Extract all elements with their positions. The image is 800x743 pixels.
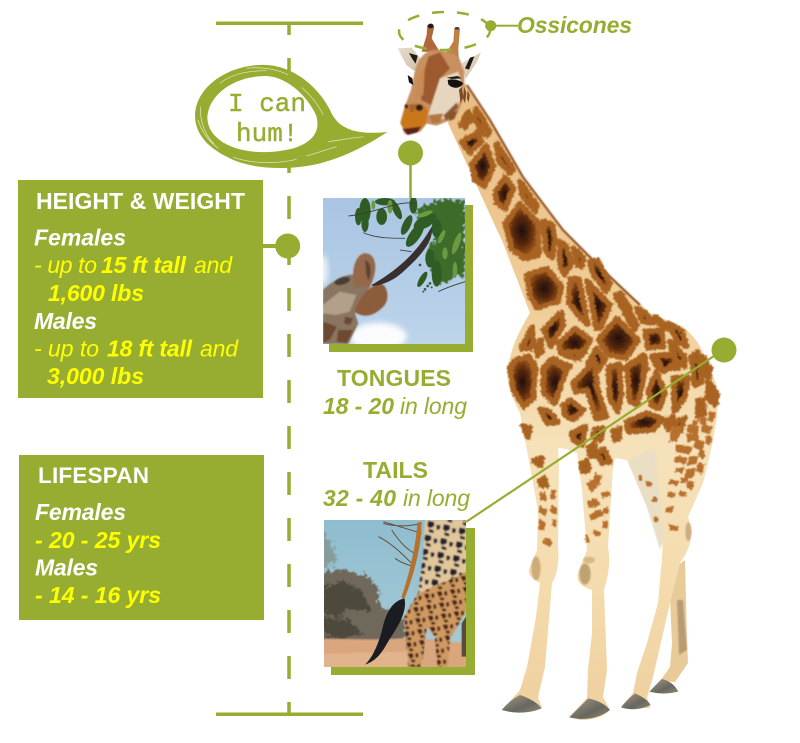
connector: tongue dot and leader [398,140,423,198]
giraffe: chest and belly spots [510,351,717,485]
giraffe: leg and thigh patches [538,412,715,546]
females lifespan [35,499,161,553]
males lifespan: Males [35,554,98,580]
giraffe: neck and shoulder spots [461,108,703,370]
females height and weight [34,252,233,306]
bubble text line 2: hum! [236,119,298,149]
females label: Females [34,224,126,250]
giraffe: far hind leg [649,560,688,693]
panel: height and weight [18,180,263,398]
males height and weight [34,336,239,389]
giraffe: eyes [448,79,463,88]
caption: tails: in long [403,485,470,511]
females height and weight: - up to [34,252,97,278]
females lifespan: Females [35,499,126,525]
caption: tails: 32 - 40 [323,485,396,511]
giraffe: face [400,50,464,135]
caption: tongues: in long [400,393,467,419]
males lifespan [35,554,161,608]
males height and weight: 3,000 lbs [47,363,144,389]
speech bubble: I can hum! [195,65,387,168]
callout: ossicones dashed ellipse and label [399,11,632,51]
males height and weight: and [200,336,239,362]
panel: lifespan [19,455,264,620]
females height and weight: 1,600 lbs [48,280,144,306]
connector: height panel to timeline [263,234,300,258]
connector: tail dot and leader [466,338,736,522]
females height and weight: 15 ft tall [101,252,187,278]
giraffe: ears [398,48,481,79]
label: ossicones: Ossicones [517,12,632,38]
giraffe: knees and hooves [502,522,691,719]
photo: tail with green offset frame [315,520,475,675]
heading: height and weight: HEIGHT & WEIGHT [36,188,245,214]
caption: tongues: TONGUES [337,365,451,391]
giraffe: ossicones [422,24,460,65]
tongue photo: foliage [355,196,465,288]
females height and weight: and [194,252,233,278]
giraffe: mane stripes [459,87,470,103]
caption: tails: TAILS [363,457,428,483]
males height and weight: - up to [34,336,99,362]
males lifespan: - 14 - 16 yrs [35,582,161,608]
caption: tongues [323,365,467,419]
photo: tongue with green offset frame [318,196,473,352]
males height and weight: 18 ft tall [107,336,193,362]
giraffe: head [398,24,481,135]
timeline: dashed vertical axis with end caps [216,0,363,716]
giraffe: inner hind leg shading [628,448,664,550]
males label: Males [34,308,97,334]
bubble text line 1: I can [228,89,306,119]
caption: tails [323,457,470,511]
illustration: giraffe [398,24,718,720]
females lifespan: - 20 - 25 yrs [35,527,161,553]
heading: lifespan: LIFESPAN [38,463,149,488]
giraffe: body silhouette [448,83,718,720]
caption: tongues: 18 - 20 [323,393,394,419]
giraffe: neck right edge shading [467,85,640,305]
giraffe: muzzle [400,103,428,134]
